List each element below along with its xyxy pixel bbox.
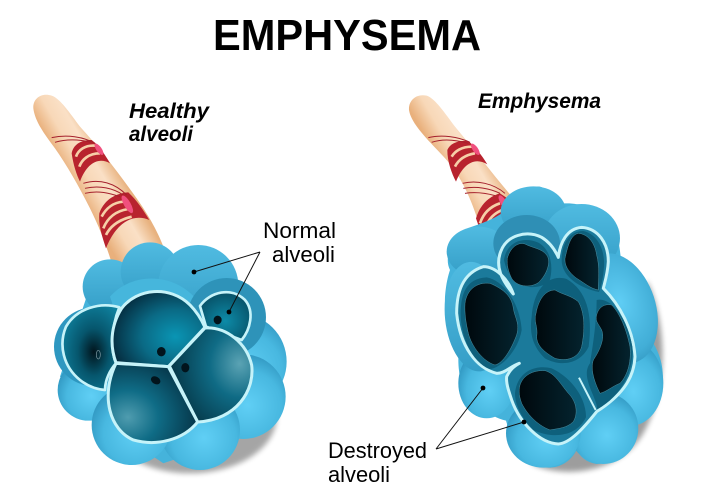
destroyed chamber 6 bbox=[519, 371, 576, 430]
emphysema airway tube bbox=[409, 95, 515, 228]
red bands, lower bbox=[83, 181, 149, 248]
label: normal alveoli bbox=[263, 218, 336, 267]
label: destroyed alveoli: alveoli bbox=[328, 462, 390, 487]
label: healthy alveoli: Healthy bbox=[129, 100, 210, 123]
label: healthy alveoli bbox=[129, 100, 210, 146]
chamber: small right bbox=[200, 292, 251, 340]
outer lobes bbox=[54, 242, 287, 470]
pointer: normal alveoli bbox=[192, 252, 260, 314]
red bands, upper bbox=[52, 136, 110, 182]
red bands, lower bbox=[463, 182, 515, 225]
chamber: left bbox=[62, 305, 119, 390]
label: emphysema: Emphysema bbox=[478, 90, 601, 113]
emphysema alveoli cluster bbox=[439, 186, 671, 472]
destroyed chamber 2 bbox=[565, 233, 599, 290]
pointer: destroyed alveoli bbox=[436, 386, 526, 449]
silhouette bbox=[445, 187, 663, 468]
shadow bbox=[103, 360, 277, 473]
destroyed chamber 4 bbox=[535, 290, 584, 360]
healthy airway tube bbox=[33, 95, 167, 268]
label: normal alveoli: alveoli bbox=[272, 242, 335, 267]
label: healthy alveoli: alveoli bbox=[129, 123, 194, 146]
label: normal alveoli: Normal bbox=[263, 218, 336, 243]
wall shading bbox=[461, 231, 632, 435]
chambers bbox=[465, 233, 630, 430]
shadow bbox=[530, 280, 662, 472]
label: destroyed alveoli: Destroyed bbox=[328, 438, 427, 463]
destroyed chamber 1 bbox=[507, 244, 549, 286]
destroyed chamber 3 bbox=[465, 283, 518, 365]
inner wall fold bbox=[579, 378, 596, 410]
red bands, upper bbox=[428, 136, 487, 182]
label: destroyed alveoli bbox=[328, 438, 427, 487]
title: EMPHYSEMA bbox=[213, 11, 481, 60]
cut surface bbox=[457, 227, 635, 444]
chamber: bottom bbox=[108, 363, 198, 443]
chamber: right bbox=[169, 328, 252, 422]
healthy alveoli cluster bbox=[54, 242, 287, 473]
chamber: top bbox=[112, 292, 205, 367]
outer lobes bbox=[439, 186, 671, 468]
openings bbox=[149, 316, 222, 386]
destroyed chamber 5 bbox=[592, 305, 630, 393]
